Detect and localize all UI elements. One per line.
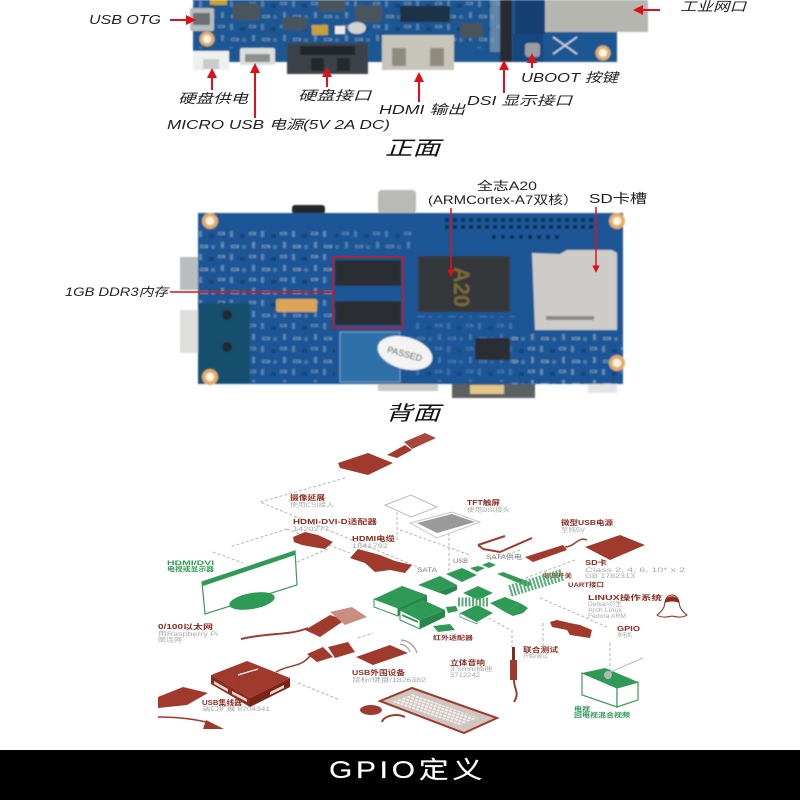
icon: HDMI cable bbox=[350, 549, 412, 573]
label: HDMI-DVI-D 适配器: 1420277 bbox=[293, 527, 330, 533]
label: HDMI-DVI-D 适配器 bbox=[293, 517, 377, 533]
top board annotations bbox=[89, 0, 747, 132]
icon: camera module bbox=[385, 495, 437, 517]
label: 10/100 ethernet: 0/100以太网 bbox=[158, 622, 213, 631]
top board: front side of PCB bbox=[190, 0, 648, 74]
label: TFT 触屏: TFT触屏 bbox=[467, 498, 500, 507]
central green board bbox=[374, 562, 562, 632]
label: 电视: 回电视混合视频 bbox=[574, 710, 631, 719]
label: LINUX 操作系统 bbox=[588, 593, 662, 620]
back board: rear side of PCB: A20 bbox=[449, 267, 474, 307]
arrow: HDMI 输出 bbox=[418, 80, 420, 102]
label: SD 卡: Class 2, 4, 6, 10* x 2 bbox=[585, 568, 686, 574]
label: 硬盘供电: 硬盘供电 bbox=[178, 91, 249, 106]
arrow: power flow bbox=[158, 717, 224, 729]
label: USB: USB bbox=[453, 558, 468, 565]
label: HDMI 电缆 bbox=[352, 534, 395, 550]
label: MICRO USB 电源: MICRO USB 电源(5V 2A DC) bbox=[167, 117, 390, 132]
label: ARMCortex-A7双核: (ARMCortex-A7双核） bbox=[428, 193, 578, 207]
label: LINUX 操作系统: Arch Linux bbox=[588, 608, 622, 614]
label: USB 集线器: USB集线器 bbox=[202, 698, 242, 707]
label: UBOOT 按键: UBOOT 按键 bbox=[521, 70, 621, 85]
label: USB 外围设备 bbox=[352, 668, 427, 684]
label: HDMI/DVI display bbox=[167, 560, 215, 573]
label: 电视 bbox=[574, 704, 631, 719]
icon: mouse bbox=[360, 705, 405, 722]
icon: ethernet cable bbox=[241, 607, 367, 639]
label: 摄像延展: 摄像延展 bbox=[290, 493, 325, 502]
label: GPIO: GPIO bbox=[617, 626, 641, 633]
arrow: SD slot bbox=[595, 207, 597, 267]
label: 微型 USB 电源: 微型USB电源 bbox=[561, 518, 613, 527]
GPIO pins bbox=[458, 575, 562, 602]
ethernet port bbox=[374, 586, 427, 616]
label: USB OTG: USB OTG bbox=[89, 12, 161, 27]
icon: HDMI-DVI adapter bbox=[293, 532, 333, 549]
label: 红外适配器: 红外适配器 bbox=[433, 634, 473, 642]
label: DSI 显示接口: DSI 显示接口 bbox=[467, 93, 573, 108]
USB ports bbox=[400, 600, 445, 629]
label: USB 集线器: 端口扩展 8704341 bbox=[202, 705, 271, 713]
label: GPIO bbox=[617, 626, 641, 639]
label: SATA: SATA bbox=[417, 567, 438, 574]
memory highlight box bbox=[333, 257, 403, 328]
label: USB 集线器 bbox=[202, 698, 271, 713]
label: SD 卡: GB 1782313 bbox=[585, 574, 636, 580]
arrow: 硬盘供电 bbox=[211, 76, 213, 90]
icon: audio jack bbox=[510, 647, 517, 702]
back board: rear side of PCB bbox=[180, 190, 625, 398]
icon: USB hub plug bbox=[276, 642, 355, 672]
footer title: GPIO定义: GPIO定义 bbox=[329, 757, 486, 784]
icon: TFT screen bbox=[410, 512, 480, 538]
label: USB 外围设备: USB外围设备 bbox=[352, 668, 405, 677]
accessories diagram bbox=[158, 433, 687, 733]
leader line: memory bbox=[170, 291, 333, 293]
label: 全志A20: 全志A20 bbox=[477, 178, 537, 193]
label: 摄像延展: 使用CSI接入 bbox=[290, 501, 334, 509]
arrow: UBOOT 按键 bbox=[531, 61, 533, 68]
label: GPIO: 发电机 bbox=[617, 631, 632, 639]
label: 联合测试: 联合测试 bbox=[523, 645, 558, 654]
label: 联合测试: 开始/调试 bbox=[523, 652, 548, 660]
label: USB 外围设备: 鼠标/键盘/1826382 bbox=[352, 676, 427, 684]
label: 电源开关: 电源开关 bbox=[542, 572, 572, 580]
label: 立体音响 bbox=[450, 658, 493, 679]
icon: SD card bbox=[585, 535, 645, 560]
label: LINUX 操作系统: Fedora ARM bbox=[588, 614, 626, 620]
label: HDMI 电缆: 1841792 bbox=[352, 544, 389, 550]
icon: remote control bbox=[356, 640, 417, 665]
label: 摄像延展 bbox=[290, 493, 334, 509]
label: 立体音响: 3.5mm插座 bbox=[450, 665, 493, 673]
label: SATA 供电: SATA供电 bbox=[486, 552, 523, 561]
label: 立体音响: 3712242 bbox=[450, 673, 481, 679]
label: HDMI/DVI display: HDMI/DVI bbox=[167, 560, 214, 567]
icon: TV box bbox=[582, 658, 643, 707]
heading: 正面: 正面 bbox=[385, 138, 444, 160]
icon: USB plug bbox=[158, 687, 208, 708]
label: 1GB DDR3内存: 1GB DDR3内存 bbox=[65, 285, 170, 299]
label: HDMI/DVI display: 电视或显示器 bbox=[167, 564, 215, 573]
label: LINUX 操作系统: LINUX操作系统 bbox=[588, 593, 662, 602]
dashed connector lines bbox=[213, 478, 610, 700]
label: LINUX 操作系统: Debian衍生 bbox=[588, 600, 622, 608]
label: TFT 触屏 bbox=[467, 498, 510, 514]
label: UART 接口: UART接口 bbox=[568, 581, 604, 589]
label: SD 卡 bbox=[585, 558, 686, 580]
label: 联合测试 bbox=[523, 645, 558, 660]
icon: tux penguin bbox=[657, 595, 687, 617]
label: SD卡槽: SD卡槽 bbox=[589, 191, 647, 206]
label: 硬盘接口: 硬盘接口 bbox=[298, 88, 372, 103]
arrow: 硬盘接口 bbox=[326, 75, 328, 87]
device: laptop drive bbox=[338, 433, 436, 475]
arrow: MICRO USB 电源 bbox=[254, 71, 256, 118]
arrow: 工业网口 bbox=[641, 9, 660, 11]
footer bar bbox=[0, 750, 800, 800]
label: 10/100 ethernet: 图连网 bbox=[158, 636, 182, 644]
label: HDMI 输出: HDMI 输出 bbox=[379, 102, 466, 117]
label: TFT 触屏: 使用DSI接头 bbox=[467, 506, 510, 514]
label: 10/100 ethernet: 用Raspberry Pi bbox=[158, 631, 218, 638]
label: SD 卡: SD卡 bbox=[585, 558, 607, 567]
arrow: USB OTG bbox=[170, 19, 188, 21]
back board annotations bbox=[65, 178, 647, 328]
heading: 背面: 背面 bbox=[385, 403, 444, 425]
icon: green monitor bbox=[202, 551, 297, 614]
label: 10/100 ethernet bbox=[158, 622, 218, 644]
icon: USB hub bbox=[211, 661, 290, 707]
arrow: A20 bbox=[450, 208, 452, 271]
icon: camera GPIO bbox=[550, 620, 592, 638]
back board: rear side of PCB: PASSED bbox=[386, 344, 424, 364]
icon: keyboard bbox=[380, 688, 497, 733]
label: HDMI 电缆: HDMI电缆 bbox=[352, 534, 395, 543]
label: 立体音响: 立体音响 bbox=[450, 658, 485, 667]
label: 微型 USB 电源 bbox=[561, 518, 613, 534]
arrow: DSI 显示接口 bbox=[503, 68, 505, 93]
icon: SATA cable bbox=[478, 536, 532, 552]
on-board chips and connectors bbox=[418, 562, 532, 632]
label: 微型 USB 电源: 至纯5V bbox=[561, 526, 585, 534]
label: HDMI-DVI-D 适配器: HDMI-DVI-D适配器 bbox=[293, 517, 377, 526]
label: 电视: 电视 bbox=[574, 704, 591, 713]
icon: micro USB cable bbox=[525, 539, 587, 562]
